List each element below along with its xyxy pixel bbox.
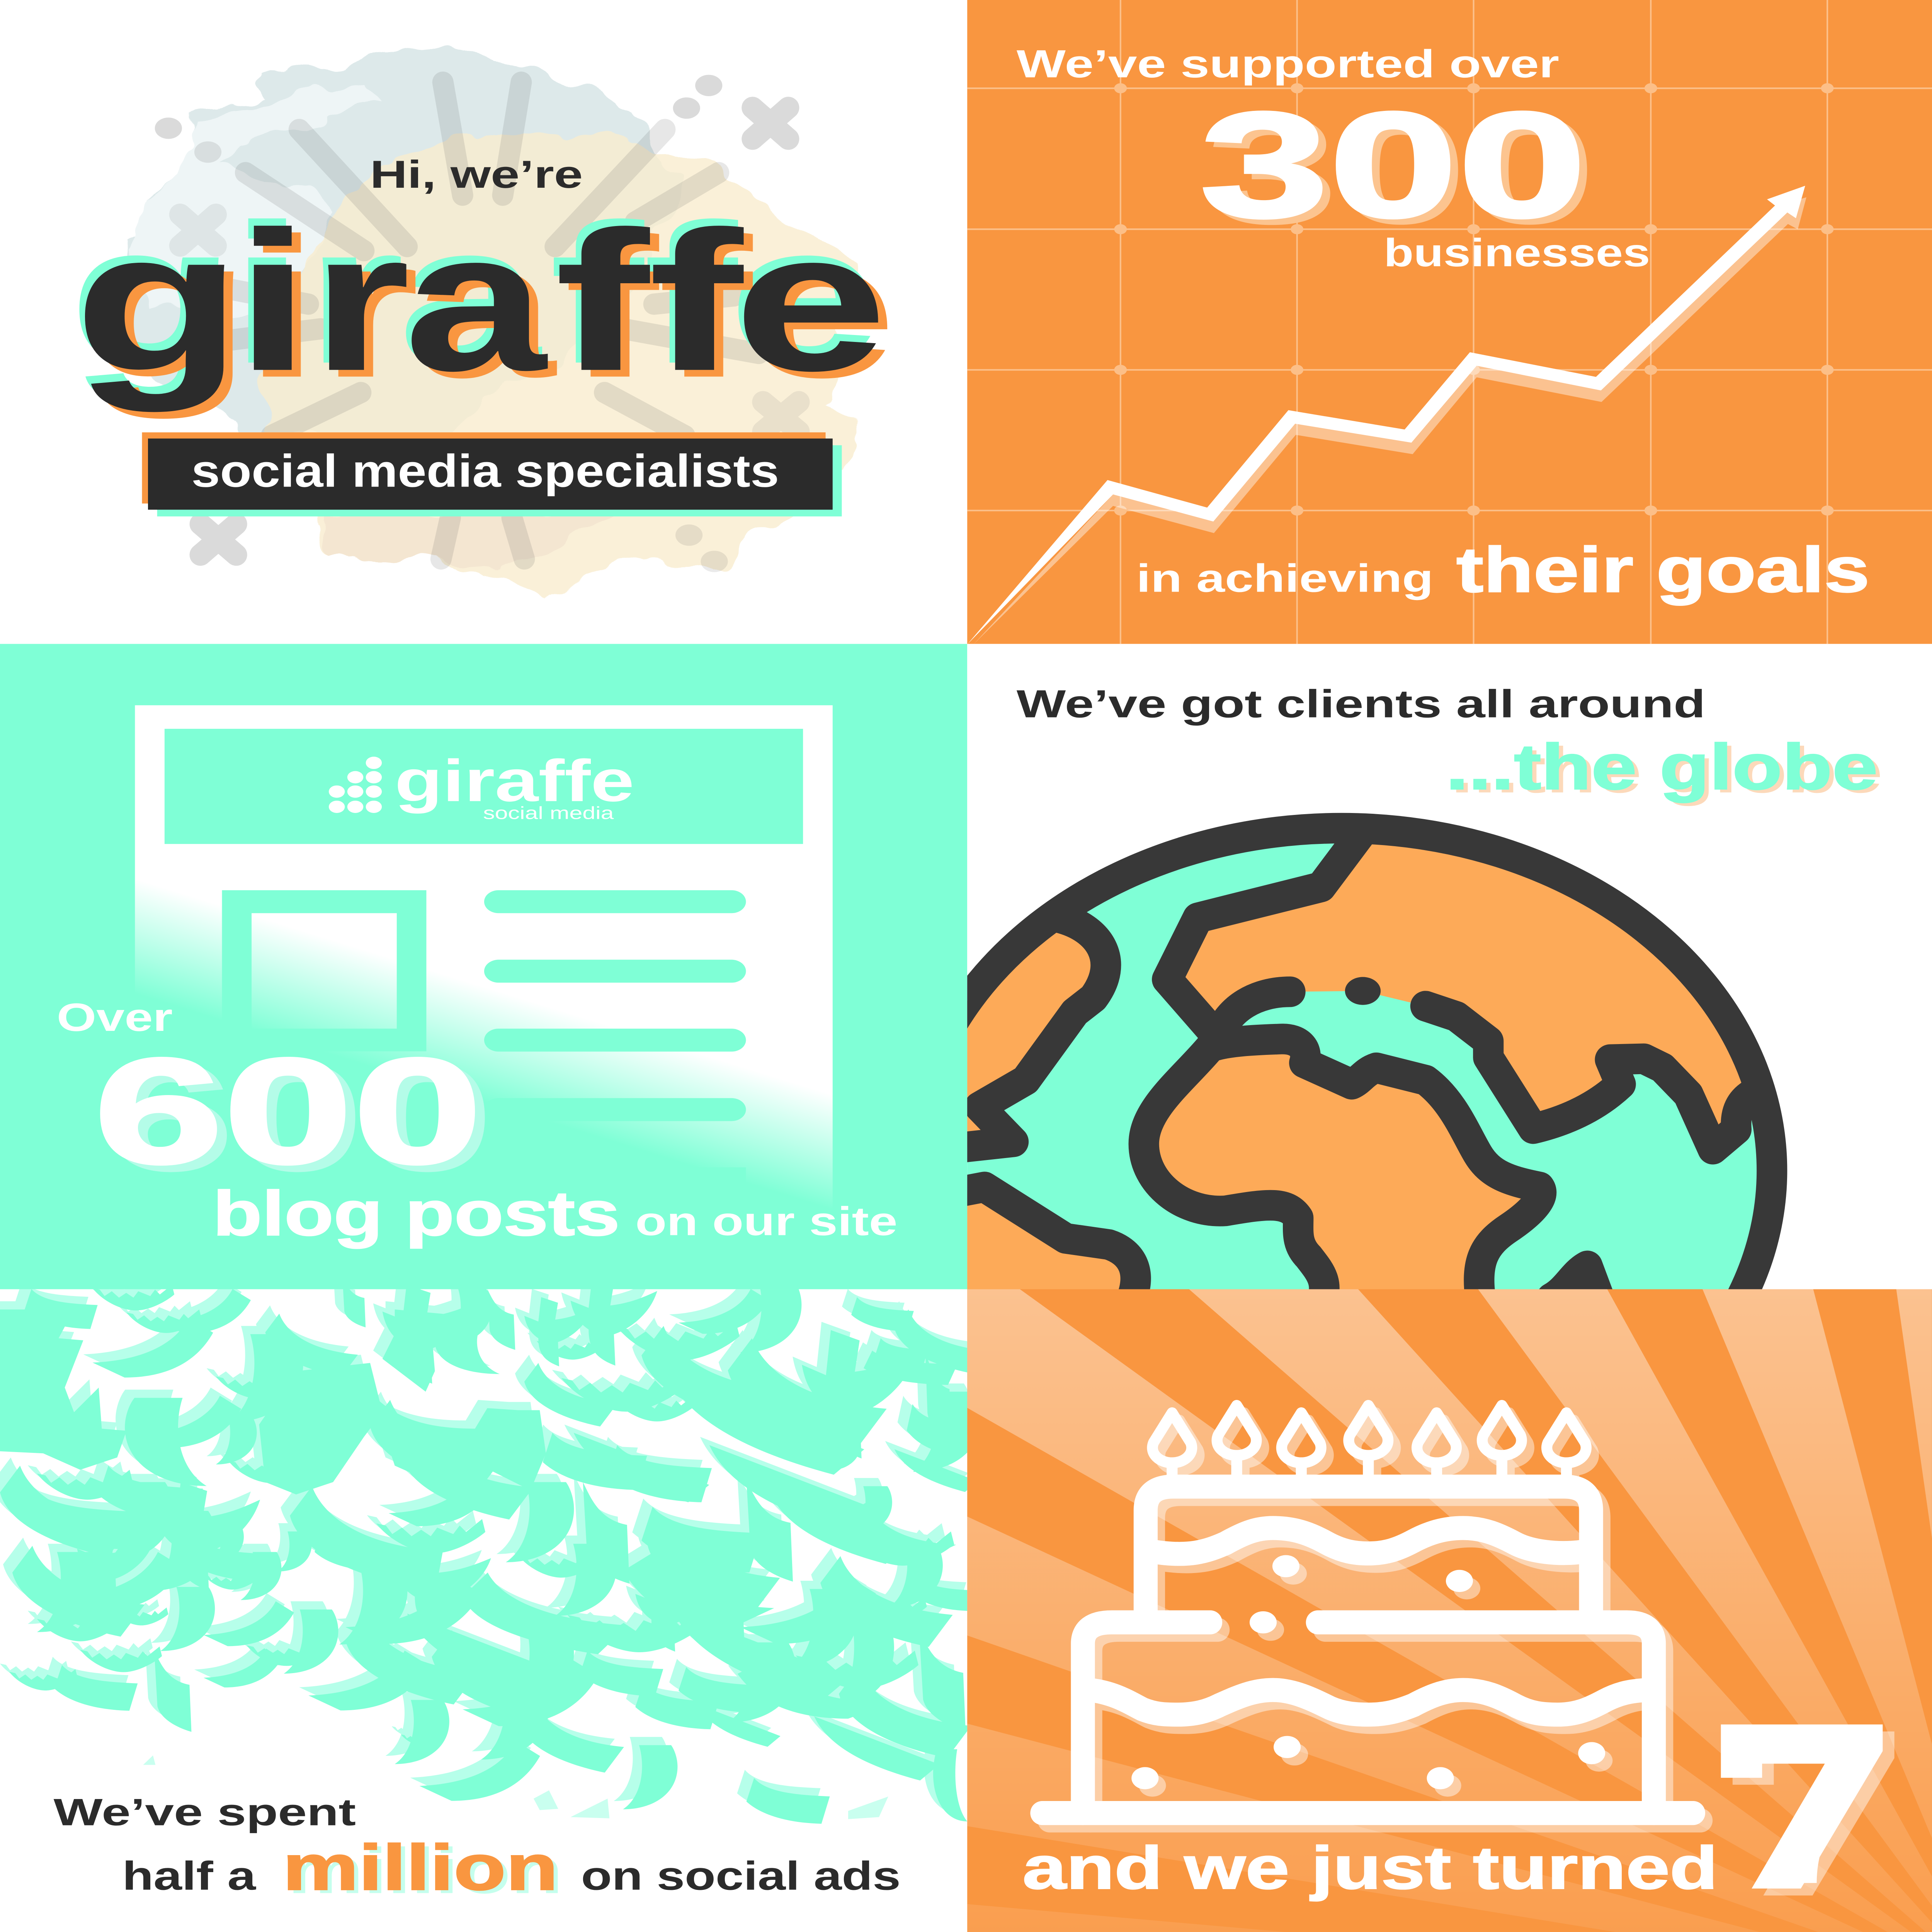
logo word: giraffe: a xyxy=(413,196,557,419)
logo word: giraffe: f xyxy=(549,182,647,405)
cake icon xyxy=(1042,1405,1693,1813)
rays around logo xyxy=(222,82,759,559)
text: million: million xyxy=(287,1835,563,1907)
logo word: giraffe: r xyxy=(306,182,405,405)
globe ring xyxy=(911,828,1772,1513)
number: 600: 600 xyxy=(104,1034,492,1201)
text: on our site: on our site xyxy=(635,1199,898,1244)
text: half a: half a xyxy=(122,1854,256,1898)
logo word: giraffe xyxy=(68,182,897,420)
globe illustration xyxy=(967,813,1787,1289)
text: their goals: their goals xyxy=(1456,534,1870,605)
heading: Hi, we're: Hi, we’re xyxy=(370,153,583,196)
tagline text: social media specialists xyxy=(191,445,779,497)
land outlines xyxy=(930,833,1755,1302)
text: in achieving: in achieving xyxy=(1136,556,1434,600)
number: 7 xyxy=(1721,1696,1895,1927)
logo word: giraffe: e xyxy=(733,190,888,412)
watercolour blobs xyxy=(92,49,848,592)
logo word: giraffe: e xyxy=(742,196,897,419)
dot in Mediterranean xyxy=(1345,977,1381,1005)
document text lines xyxy=(484,890,746,1252)
document image frame xyxy=(222,890,426,1051)
text: the globe: ...the globe xyxy=(1451,734,1883,806)
logo word: giraffe: f xyxy=(643,182,741,405)
logo: giraffe social media: social media xyxy=(483,803,614,823)
text: blog posts: blog posts xyxy=(213,1179,620,1249)
falling money feathers xyxy=(0,1269,987,1824)
logo word: giraffe: a xyxy=(404,190,548,412)
decorative crosses xyxy=(180,108,799,555)
logo word: giraffe: r xyxy=(311,190,410,412)
number: 300: 300 xyxy=(1208,87,1594,254)
text: We've supported over: We’ve supported over xyxy=(1017,42,1559,86)
text: million: million xyxy=(282,1832,558,1904)
text: We've spent: We’ve spent xyxy=(54,1791,356,1833)
logo word: giraffe: r xyxy=(321,196,419,419)
panel: clients around the globe xyxy=(967,644,1932,1289)
text: and we just turned: and we just turned xyxy=(1022,1834,1718,1901)
logo: giraffe social media: giraffe xyxy=(395,748,634,814)
logo word: giraffe: g xyxy=(74,190,243,413)
number 7 shadow xyxy=(1733,1731,1895,1895)
logo word: giraffe: f xyxy=(658,196,755,419)
logo word: giraffe: i xyxy=(235,190,311,412)
text: We've got clients all around: We’ve got clients all around xyxy=(1017,682,1706,726)
logo word: giraffe: i xyxy=(244,196,320,419)
panel: blog posts xyxy=(0,644,967,1289)
logo word: giraffe: e xyxy=(728,182,882,405)
logo word: giraffe: i xyxy=(229,182,306,405)
logo word: giraffe: g xyxy=(83,196,252,420)
chart grid xyxy=(967,0,1932,644)
sunburst rays and cake xyxy=(967,1289,1932,1932)
globe ocean xyxy=(967,844,1757,1289)
text: on social ads: on social ads xyxy=(581,1854,901,1898)
document icon xyxy=(135,705,833,1289)
text: businesses: businesses xyxy=(1384,230,1650,275)
panel: birthday xyxy=(967,1289,1932,1932)
panel: ad spend xyxy=(0,1289,967,1932)
text: Over: Over xyxy=(57,995,173,1039)
document header band xyxy=(165,729,803,844)
panel: intro background xyxy=(0,0,967,644)
number 7 bold form xyxy=(1721,1725,1883,1888)
cake shadow xyxy=(1050,1413,1701,1820)
arrow: growth line xyxy=(967,186,1806,645)
logo word: giraffe: f xyxy=(554,190,653,412)
logo word: giraffe: a xyxy=(398,182,542,405)
logo word: giraffe: f xyxy=(564,196,662,419)
number 7 glyph: 7 xyxy=(1744,1696,1885,1927)
number: 600: 600 xyxy=(94,1027,482,1195)
tagline bar xyxy=(142,432,842,516)
logo: giraffe social media xyxy=(329,748,634,823)
text: the globe: ...the globe xyxy=(1446,731,1878,803)
decorative dots xyxy=(155,75,728,572)
land fills xyxy=(967,844,1741,1289)
panel: businesses supported xyxy=(967,0,1932,644)
panel: intro artwork xyxy=(92,49,848,592)
logo word: giraffe: g xyxy=(68,182,237,406)
sunburst rays xyxy=(967,1289,1932,1932)
number: 300: 300 xyxy=(1200,81,1587,248)
logo word: giraffe: f xyxy=(648,190,746,412)
